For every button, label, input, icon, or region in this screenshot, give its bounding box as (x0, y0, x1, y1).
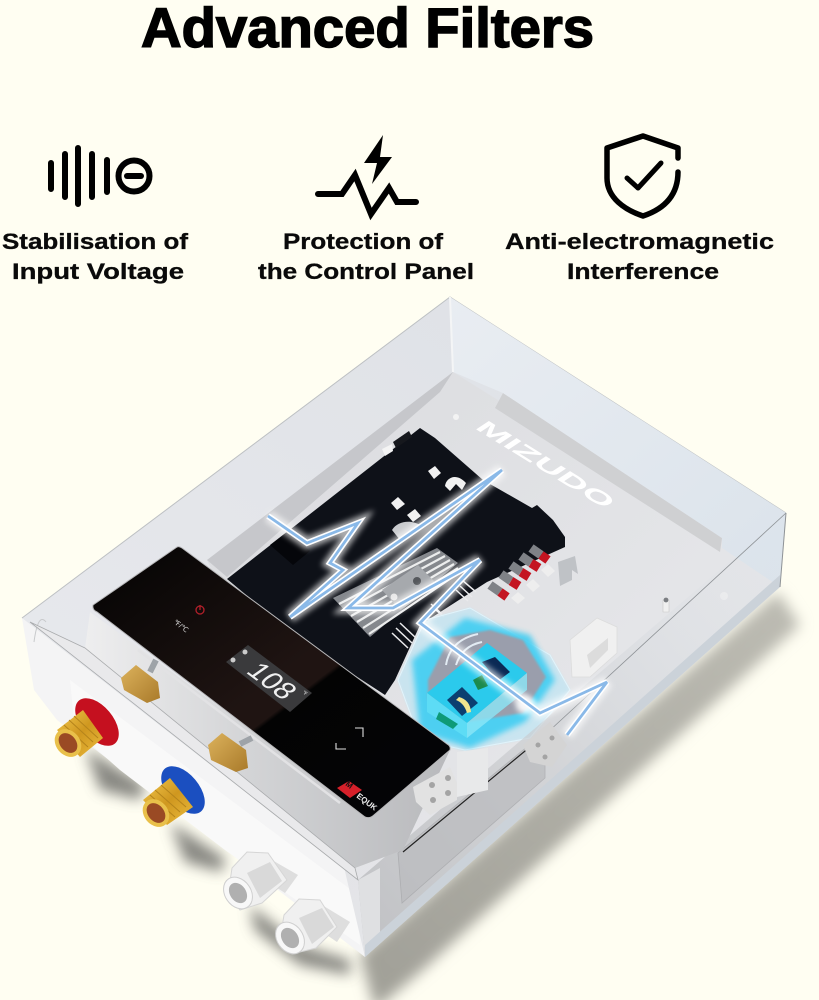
icon: shield with check (607, 136, 678, 216)
brand badge (337, 779, 379, 813)
label: protection of the control panel (258, 229, 474, 284)
label: anti-electromagnetic interference: Interference (567, 259, 719, 284)
label: stabilisation of input voltage: Input Voltage (12, 259, 184, 284)
lid top (22, 297, 786, 880)
front face (22, 618, 365, 957)
brand badge: M (344, 779, 355, 791)
adjustment chevrons (336, 728, 363, 749)
corner recess (34, 620, 46, 642)
brass nuts behind panel (121, 660, 252, 772)
control panel (93, 547, 450, 818)
strip next to corner (358, 868, 380, 957)
label: protection of the control panel: Protection of (283, 229, 444, 254)
brand badge: EQUK (355, 791, 379, 813)
label: anti-electromagnetic interference: Anti-electromagnetic (505, 229, 774, 254)
edge switch (393, 431, 412, 448)
glass wall of lid (450, 297, 786, 587)
bottom band (365, 575, 780, 957)
unit toggle: ℉/℃ (172, 619, 189, 635)
icon: waveform with circle (51, 148, 150, 204)
lid edge (548, 513, 786, 732)
mounting post (663, 600, 669, 612)
control panel: 108 (240, 657, 304, 704)
cavity below control panel (85, 612, 450, 868)
circuit board (227, 428, 565, 695)
outer casing (22, 297, 786, 957)
front face highlight around fittings (70, 680, 360, 945)
right side face (358, 513, 786, 957)
feature: input voltage stabilisation (2, 148, 189, 284)
product shadows (85, 592, 800, 1000)
feature: anti-electromagnetic interference (505, 136, 774, 284)
label: protection of the control panel: the Control Panel (258, 259, 474, 284)
circuit module (427, 643, 527, 723)
panel chrome edge (138, 650, 340, 803)
glow arcs (446, 634, 482, 665)
terminal blocks (413, 722, 567, 815)
chip on board (270, 531, 310, 565)
recess panel (398, 732, 545, 903)
terminal row: red pins (490, 548, 578, 604)
feature: control panel protection (258, 135, 474, 284)
shield glow (398, 608, 570, 750)
cable glands (218, 852, 350, 959)
icon: lightning pulse (318, 135, 416, 214)
electric pulse lines (268, 470, 607, 735)
temperature display (226, 645, 312, 712)
label: stabilisation of input voltage: Stabilisation of (2, 229, 189, 254)
hatch marks (392, 580, 476, 648)
label: stabilisation of input voltage (2, 229, 189, 284)
heatsink (333, 548, 460, 637)
inner tray plate (207, 372, 780, 957)
product illustration: water heater (22, 297, 800, 1000)
front rim strip (30, 622, 358, 880)
power icon (196, 605, 204, 614)
terminals (391, 466, 466, 540)
hot water inlet fitting (49, 690, 127, 762)
brand mark: MIZUDO: MIZUDO (470, 418, 621, 512)
cold water inlet fitting (137, 758, 213, 832)
control panel: ℉ (301, 690, 308, 698)
small white transformer (570, 618, 617, 677)
label: anti-electromagnetic interference (505, 229, 774, 284)
